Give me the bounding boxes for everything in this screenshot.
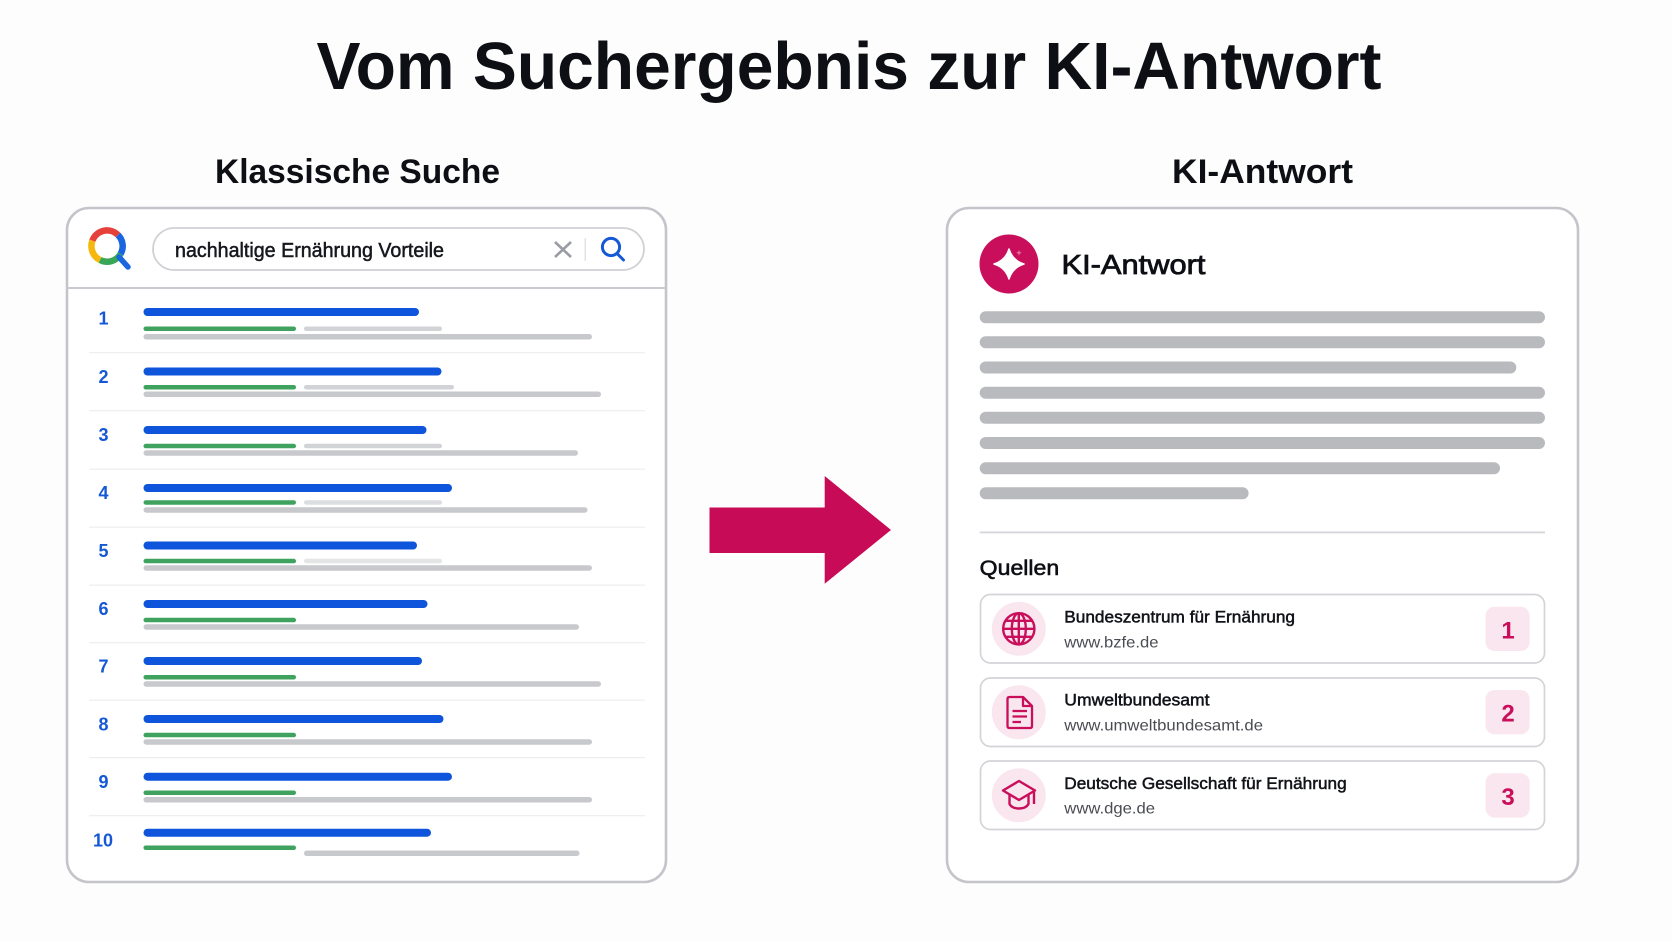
heading: KI-Antwort: KI-Antwort (1172, 153, 1353, 191)
source card 3 (980, 761, 1544, 830)
result 2: 2 (98, 367, 109, 387)
result 6: 6 (98, 599, 109, 619)
result 9 (98, 772, 592, 802)
result 2 (98, 367, 601, 397)
panel: classic search (67, 208, 666, 882)
source card 2: Umweltbundesamt (1064, 691, 1210, 710)
source card 1: 1 (1501, 618, 1515, 644)
icon: colourful search logo (91, 230, 128, 267)
result 5 (98, 541, 592, 571)
panel: KI answer (947, 208, 1578, 882)
sources heading: Quellen (980, 556, 1059, 580)
source card 3: Deutsche Gesellschaft für Ernährung (1064, 774, 1347, 793)
source card 1: www.bzfe.de (1063, 634, 1159, 651)
result 5: 5 (98, 541, 109, 561)
result 8 (98, 714, 592, 745)
result 4: 4 (98, 483, 109, 503)
icon: globe (992, 602, 1046, 656)
arrow (710, 476, 891, 584)
answer text placeholder lines (980, 311, 1545, 499)
icon: graduation cap (992, 768, 1046, 822)
result 7 (98, 656, 601, 687)
icon: sparkle badge (980, 234, 1038, 294)
source card 3: 3 (1501, 784, 1515, 811)
result 7: 7 (98, 656, 109, 676)
heading: Klassische Suche: Klassische Suche (215, 153, 500, 191)
result 3 (98, 425, 578, 456)
result 4 (98, 483, 588, 513)
result 8: 8 (98, 714, 109, 734)
icon: document (992, 685, 1046, 739)
search field (153, 228, 644, 270)
source card 2: 2 (1501, 701, 1515, 728)
icon: search (602, 238, 624, 260)
result 9: 9 (98, 772, 109, 792)
result 3: 3 (98, 425, 109, 445)
result 10: 10 (93, 830, 113, 850)
source card 3: www.dge.de (1063, 801, 1155, 818)
source card 2: www.umweltbundesamt.de (1063, 718, 1263, 735)
panel heading: KI-Antwort (1062, 249, 1206, 280)
source card 1 (980, 594, 1544, 663)
search query: nachhaltige Ernährung Vorteile (175, 240, 444, 262)
result 1 (98, 308, 592, 340)
source card 2 (980, 678, 1544, 746)
result 1: 1 (98, 308, 109, 328)
icon: clear (555, 242, 571, 257)
source card 1: Bundeszentrum für Ernährung (1064, 608, 1295, 627)
result 6 (98, 599, 579, 630)
result 10 (93, 829, 580, 856)
title: Vom Suchergebnis zur KI-Antwort (316, 29, 1382, 104)
